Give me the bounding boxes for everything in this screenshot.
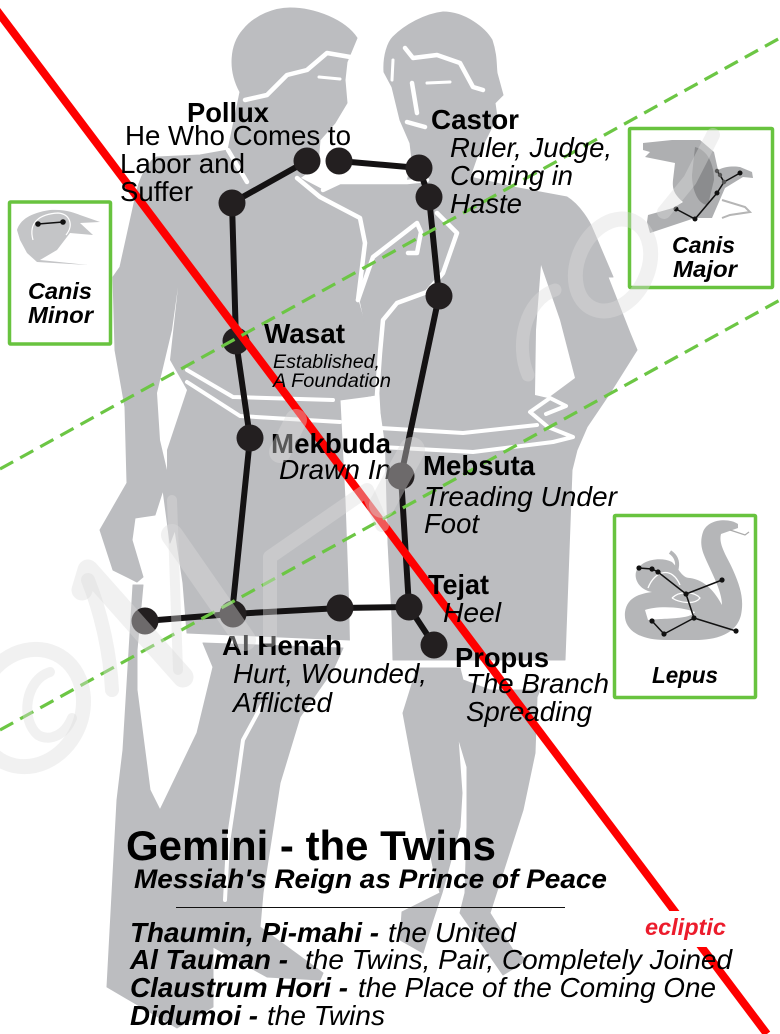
star label: Castor: Castor [431, 104, 519, 135]
panel: Canis Major [630, 128, 772, 288]
panel: Canis Minor [10, 202, 110, 344]
panel: Lepus [614, 516, 756, 698]
panel: Canis Minor: Canis [28, 278, 92, 304]
star label: Al Henah [222, 630, 427, 718]
star label: Pollux: Pollux [187, 97, 270, 128]
star label: Wasat: A Foundation [272, 370, 391, 392]
star label: Tejat [428, 569, 502, 628]
icon: Canis Minor creature [17, 210, 100, 265]
star label: Mekbuda [271, 428, 392, 485]
star label: Pollux: Suffer [120, 176, 193, 207]
star label: Pollux: He Who Comes to [125, 120, 351, 151]
star label: Al Henah: Hurt, Wounded, [233, 658, 427, 689]
list of names [129, 917, 733, 1031]
icon: Canis Major bird [643, 140, 753, 233]
star label: Tejat: Heel [443, 597, 502, 628]
list of names: Thaumin, Pi-mahi - [130, 917, 379, 948]
list of names: Al Tauman - [129, 944, 288, 975]
star label: Wasat: Established, [273, 351, 380, 373]
panel: Canis Minor: Minor [28, 302, 94, 328]
star label: Mebsuta: Foot [424, 508, 480, 539]
star label: Al Henah: Afflicted [231, 687, 333, 718]
panel: Lepus: Lepus [652, 662, 718, 688]
star label: Castor [431, 104, 612, 219]
star label: Pollux: Labor and [120, 148, 245, 179]
list of names: the Twins, Pair, Completely Joined [305, 944, 733, 975]
constellation stick figure [132, 148, 452, 658]
star label: Tejat: Tejat [428, 569, 489, 600]
star label: Castor: Ruler, Judge, [450, 132, 612, 163]
title: Gemini - the Twins [126, 822, 496, 869]
star label: Al Henah: Al Henah [222, 630, 342, 661]
star label: Propus [455, 642, 609, 727]
star label: Mebsuta: Mebsuta [423, 450, 536, 481]
star label: Wasat: Wasat [264, 318, 345, 349]
icon: Lepus serpent [625, 520, 749, 640]
star label: Pollux [120, 97, 351, 207]
star label: Mebsuta [423, 450, 619, 539]
ecliptic label: ecliptic [645, 914, 726, 940]
star label: Castor: Haste [450, 188, 522, 219]
star label: Propus: Propus [455, 642, 549, 673]
panel: Canis Major: Major [673, 256, 738, 282]
star label: Castor: Coming in [450, 160, 573, 191]
list of names: Claustrum Hori - [130, 972, 348, 1003]
list of names: the United [388, 917, 517, 948]
list of names: the Place of the Coming One [358, 972, 716, 1003]
list of names: the Twins [267, 1000, 385, 1031]
watermark [0, 135, 713, 784]
panel: Canis Major: Canis [672, 232, 735, 258]
star label: Mekbuda: Mekbuda [271, 428, 392, 459]
star label: Mebsuta: Treading Under [424, 481, 619, 512]
star label: Wasat [264, 318, 391, 392]
list of names: Didumoi - [130, 1000, 258, 1031]
twin figures silhouette [100, 8, 637, 1028]
star label: Mekbuda: Drawn In [279, 454, 391, 485]
star label: Propus: The Branch [466, 668, 609, 699]
green dashed boundary lines [0, 38, 780, 730]
subtitle: Messiah's Reign as Prince of Peace [134, 864, 607, 894]
star label: Propus: Spreading [466, 696, 592, 727]
